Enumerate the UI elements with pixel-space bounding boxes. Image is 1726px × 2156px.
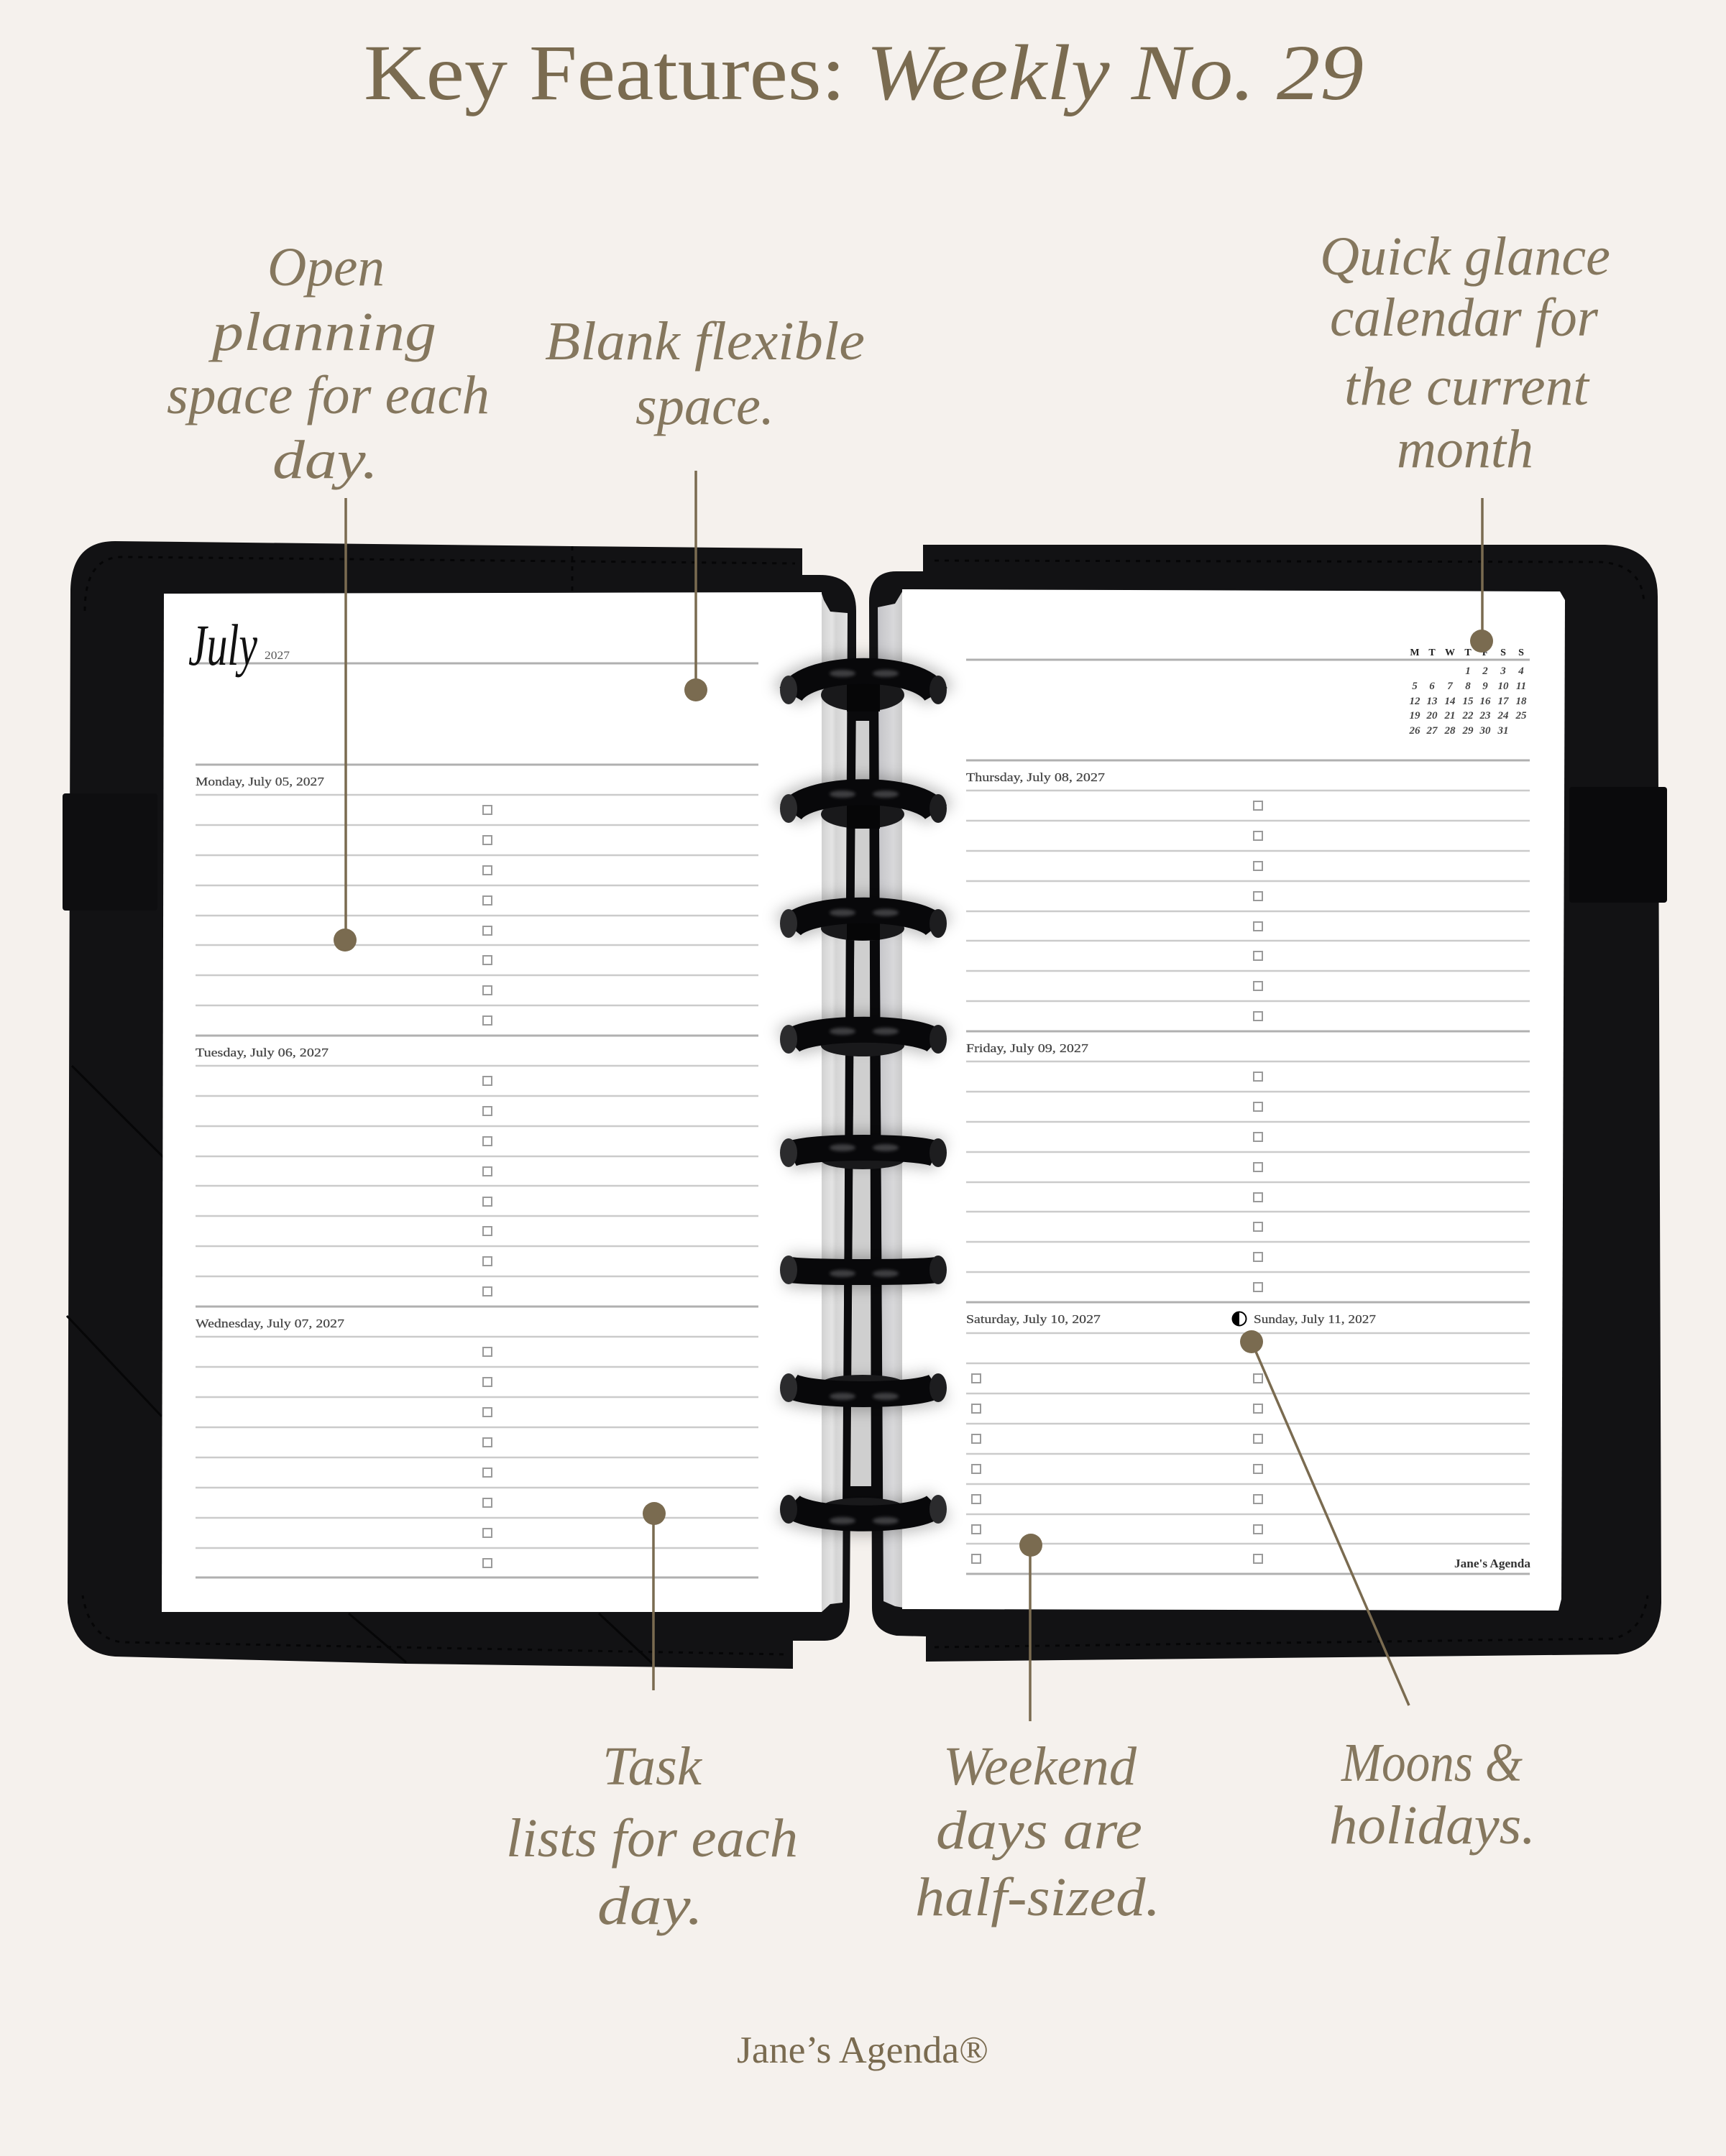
mini calendar: 16 bbox=[1479, 696, 1491, 707]
mini calendar: 12 bbox=[1409, 696, 1420, 707]
elastic band right bbox=[1569, 787, 1667, 903]
title: Weekly No. 29 bbox=[866, 29, 1364, 116]
mini calendar: 27 bbox=[1426, 725, 1438, 737]
callout: moons and holidays: Moons & bbox=[1341, 1733, 1523, 1793]
mini calendar: 2 bbox=[1482, 665, 1488, 677]
callout: open planning space bbox=[167, 237, 490, 952]
callout: open planning space: space for each bbox=[167, 365, 490, 425]
callout: moons and holidays: holidays. bbox=[1329, 1795, 1536, 1856]
mini calendar: 4 bbox=[1518, 665, 1524, 677]
elastic band left bbox=[63, 793, 157, 911]
callout: open planning space: Open bbox=[267, 237, 385, 298]
mini calendar: 1 bbox=[1465, 665, 1471, 677]
mini calendar: 7 bbox=[1447, 681, 1453, 692]
mini calendar: 26 bbox=[1409, 725, 1420, 737]
mini calendar: T bbox=[1464, 648, 1472, 658]
right page day labels: Sunday, July 11, 2027 bbox=[1254, 1312, 1377, 1326]
right leather cover bbox=[869, 545, 1661, 1662]
mini calendar: 14 bbox=[1445, 696, 1456, 707]
spine bars bbox=[843, 690, 883, 1509]
left page day labels: Monday, July 05, 2027 bbox=[196, 775, 325, 788]
mini calendar: 17 bbox=[1498, 696, 1509, 707]
binder ring 5 bbox=[780, 1138, 947, 1169]
mini calendar: 23 bbox=[1479, 710, 1491, 722]
right page bbox=[902, 589, 1565, 1611]
mini calendar: M bbox=[1410, 648, 1420, 658]
right page day labels: Saturday, July 10, 2027 bbox=[966, 1312, 1101, 1326]
mini calendar: 5 bbox=[1412, 681, 1418, 692]
binder ring 7 bbox=[780, 1373, 947, 1402]
callout: quick glance calendar: month bbox=[1397, 419, 1533, 479]
callout: open planning space: day. bbox=[272, 430, 378, 490]
month heading July 2027: 2027 bbox=[265, 650, 290, 662]
title: Key Features: bbox=[364, 29, 845, 116]
mini calendar: 30 bbox=[1479, 725, 1491, 737]
binder ring 3 bbox=[780, 909, 947, 941]
left page day labels: Wednesday, July 07, 2027 bbox=[196, 1317, 345, 1330]
binder ring 6 bbox=[780, 1256, 947, 1284]
binder ring 2 bbox=[780, 791, 947, 829]
footer brand: Jane’s Agenda® bbox=[737, 2030, 988, 2071]
month heading July 2027: July bbox=[188, 612, 257, 678]
mini calendar: 13 bbox=[1426, 696, 1438, 707]
mini calendar: T bbox=[1428, 648, 1436, 658]
mini calendar: 28 bbox=[1443, 725, 1456, 737]
page stack left bbox=[822, 594, 848, 1612]
left page rules bbox=[196, 663, 758, 1577]
mini calendar: S bbox=[1500, 648, 1506, 658]
binder ring 1 bbox=[780, 670, 947, 711]
callout: weekend days: Weekend bbox=[943, 1736, 1137, 1797]
mini calendar bbox=[1409, 648, 1527, 737]
callout: blank flexible space: Blank flexible bbox=[545, 311, 865, 372]
mini calendar: 11 bbox=[1516, 681, 1526, 692]
left page day labels: Tuesday, July 06, 2027 bbox=[196, 1046, 329, 1059]
page footer brand: Jane's Agenda bbox=[1454, 1557, 1530, 1570]
mini calendar: S bbox=[1518, 648, 1524, 658]
binder ring 8 bbox=[780, 1495, 947, 1524]
callout: weekend days: half-sized. bbox=[915, 1867, 1160, 1927]
left page day labels bbox=[196, 775, 345, 1330]
mini calendar: 6 bbox=[1429, 681, 1435, 692]
mini calendar: 21 bbox=[1443, 710, 1455, 722]
callout: quick glance calendar bbox=[1320, 226, 1610, 653]
mini calendar: 9 bbox=[1482, 681, 1488, 692]
planner photo bbox=[63, 541, 1667, 1669]
callout: open planning space: planning bbox=[208, 302, 436, 362]
page stack right bbox=[878, 589, 904, 1608]
right page rules bbox=[966, 660, 1530, 1574]
mini calendar: 8 bbox=[1465, 681, 1471, 692]
mini calendar: 20 bbox=[1426, 710, 1438, 722]
left page checkboxes bbox=[483, 806, 492, 1567]
right page day labels: Friday, July 09, 2027 bbox=[966, 1041, 1089, 1055]
mini calendar: 10 bbox=[1498, 681, 1509, 692]
right page day labels bbox=[966, 770, 1377, 1326]
right page day labels: Thursday, July 08, 2027 bbox=[966, 770, 1106, 784]
mini calendar: F bbox=[1482, 648, 1488, 658]
callout: task lists bbox=[506, 1502, 798, 1936]
callout: blank flexible space bbox=[545, 311, 865, 701]
title bbox=[364, 29, 1364, 116]
mini calendar: 25 bbox=[1515, 710, 1527, 722]
left leather cover bbox=[67, 541, 856, 1669]
mini calendar: 24 bbox=[1497, 710, 1509, 722]
callout: task lists: day. bbox=[597, 1876, 703, 1936]
mini calendar: 29 bbox=[1462, 725, 1474, 737]
mini calendar: 19 bbox=[1409, 710, 1420, 722]
icon: moon phase bbox=[1232, 1312, 1247, 1326]
callout: task lists: Task bbox=[602, 1736, 702, 1797]
mini calendar: 3 bbox=[1500, 665, 1506, 677]
callout: moons and holidays bbox=[1240, 1330, 1536, 1856]
mini calendar: W bbox=[1445, 648, 1455, 658]
callout: weekend days bbox=[915, 1534, 1160, 1927]
mini calendar: 18 bbox=[1515, 696, 1527, 707]
callout: blank flexible space: space. bbox=[635, 376, 774, 436]
mini calendar: 31 bbox=[1497, 725, 1508, 737]
callout: quick glance calendar: Quick glance bbox=[1320, 226, 1610, 287]
callout: task lists: lists for each bbox=[506, 1808, 798, 1869]
binder ring 4 bbox=[780, 1025, 947, 1056]
mini calendar: 15 bbox=[1462, 696, 1474, 707]
callout: quick glance calendar: calendar for bbox=[1330, 287, 1598, 348]
mini calendar: 22 bbox=[1462, 710, 1474, 722]
callout: weekend days: days are bbox=[936, 1800, 1142, 1861]
spine gap bbox=[851, 711, 871, 1486]
callout: quick glance calendar: the current bbox=[1344, 356, 1590, 417]
right page checkboxes bbox=[972, 801, 1262, 1563]
left page bbox=[162, 592, 822, 1612]
